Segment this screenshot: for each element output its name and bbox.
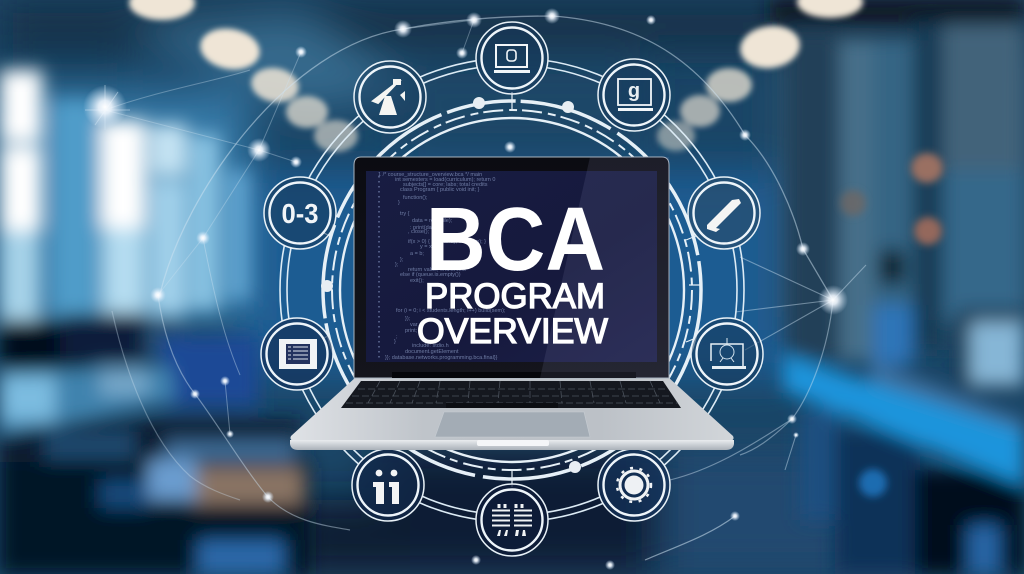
code lines: try { — [400, 211, 410, 217]
code lines: if(x > 0) { loop(array, list, map); } — [408, 239, 486, 245]
title: PROGRAM: PROGRAM — [425, 277, 605, 316]
right columns — [787, 30, 840, 360]
code lines: , close(); — [408, 229, 430, 235]
code lines: }}; database.networks.programming.bca.final}} — [385, 355, 498, 361]
icon: 0-3 number badge — [264, 177, 336, 249]
code lines: } — [394, 339, 396, 345]
icon: gear — [598, 449, 670, 521]
icon: ii people — [352, 449, 424, 521]
ring nodes — [321, 97, 581, 473]
code lines: include: stdio.h — [412, 343, 449, 349]
network: thin arcs and nodes — [83, 8, 866, 570]
latch — [477, 440, 549, 446]
code lines: a = b; — [410, 251, 424, 257]
ceiling lights — [129, 0, 863, 152]
icon: monitor top — [476, 22, 548, 94]
monitor — [958, 310, 1024, 390]
code lines: y = x; — [420, 244, 434, 250]
right desk — [870, 360, 1024, 445]
icon: monitor with g top-right: g — [628, 80, 640, 102]
icon: monitor with g top-right — [598, 59, 670, 131]
title: BCA: BCA — [426, 190, 605, 290]
code lines: } — [398, 200, 400, 206]
central concentric rings — [321, 92, 701, 487]
code lines: function(); — [403, 195, 428, 201]
code lines: }; — [400, 257, 404, 263]
screen reflection — [540, 157, 669, 378]
laptop lid — [354, 157, 669, 378]
code lines — [378, 172, 506, 361]
laptop — [290, 157, 734, 450]
laptop base deck — [290, 377, 734, 441]
front lip — [290, 440, 734, 450]
code lines: var a; — [410, 322, 424, 328]
line numbers — [378, 176, 380, 358]
code lines: else if (queue.is.empty()) — [400, 272, 461, 278]
keyboard — [341, 381, 681, 408]
code lines: }; — [395, 262, 399, 268]
code lines: for (i = 0; i < students.length; i++) build(sem); — [396, 308, 506, 314]
left dark desks — [0, 320, 90, 370]
code lines: class Program { public void init; } — [400, 187, 480, 193]
code lines: : print(data); — [410, 225, 440, 231]
icon: pencil — [688, 177, 760, 249]
left windows — [0, 230, 40, 322]
icon: document panel — [261, 318, 333, 390]
trackpad — [435, 412, 590, 437]
code lines: document.getElement — [405, 349, 459, 355]
icon: chip lines — [476, 484, 548, 556]
code lines: int semesters = load(curriculum); return 0 — [395, 177, 495, 183]
title: OVERVIEW: OVERVIEW — [417, 312, 608, 351]
connector double arcs between icons — [280, 58, 744, 522]
code lines: data = read(file); — [412, 218, 453, 224]
icon: tools top-left — [354, 61, 426, 133]
code lines: ; — [396, 334, 398, 340]
icon: 0-3 number badge: 0-3 — [282, 198, 318, 229]
code lines: exit(); — [410, 278, 424, 284]
code lines: return value; end.of.text — [408, 267, 466, 273]
code lines: subjects[] = core; labs; total credits — [403, 182, 488, 188]
code lines: 1 /* course_structure_overview.bca */ main — [378, 172, 482, 178]
code lines: print; — [405, 328, 418, 334]
icon: robot on monitor — [691, 318, 763, 390]
code lines: }); — [405, 316, 411, 322]
laptop screen — [366, 171, 657, 362]
